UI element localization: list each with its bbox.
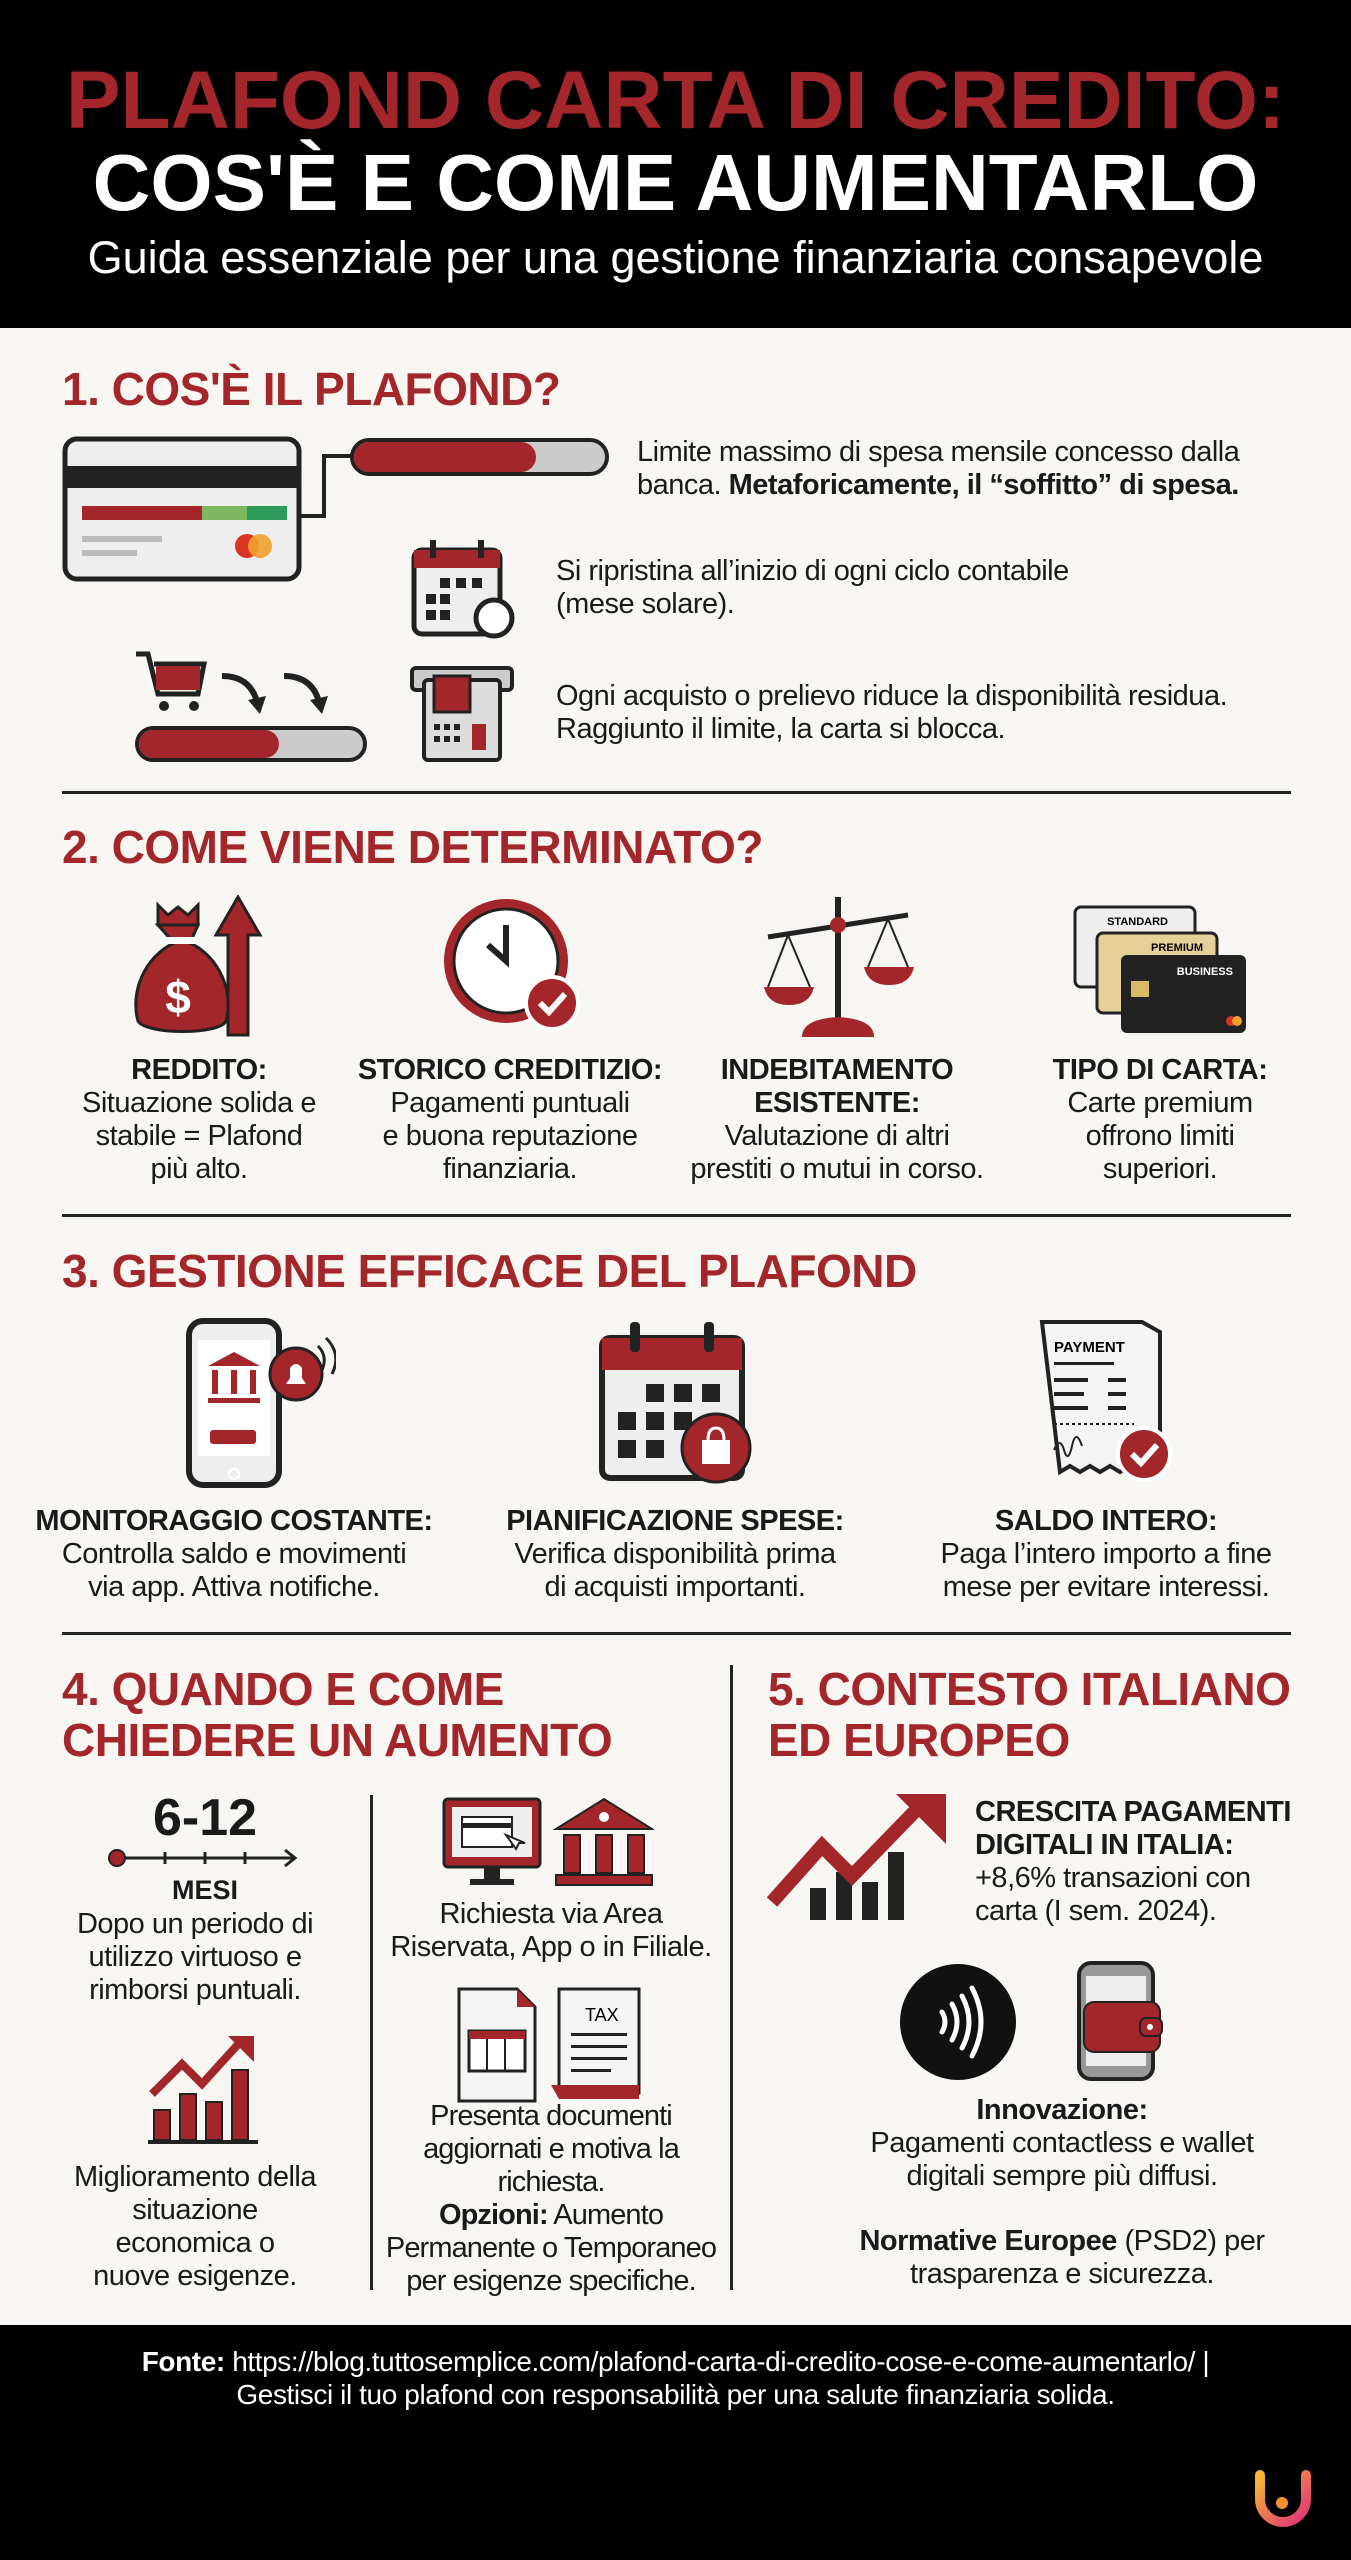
icon: contactless	[900, 1964, 1016, 2080]
text: normative	[859, 2225, 1265, 2290]
label: indebitamento: Valutazione di altri	[725, 1120, 949, 1152]
label: indebitamento: ESISTENTE:	[754, 1087, 920, 1119]
text: innovazione: Innovazione:	[976, 2094, 1148, 2126]
label: monitoraggio: MONITORAGGIO COSTANTE:	[35, 1505, 433, 1537]
timeline 6-12 mesi	[108, 1789, 298, 1905]
icon: clock check	[444, 899, 580, 1031]
header	[0, 0, 1351, 328]
section 2 heading: 2. COME VIENE DETERMINATO?	[62, 821, 763, 873]
label: reddito: stabile = Plafond	[96, 1120, 302, 1152]
section 5 heading: 5. CONTESTO ITALIANO	[768, 1663, 1290, 1715]
text: reset cycle	[556, 555, 1069, 620]
text: crescita: CRESCITA PAGAMENTI	[975, 1796, 1291, 1828]
text: periodo: Dopo un periodo di	[77, 1908, 313, 1940]
text: miglioramento: situazione	[132, 2194, 258, 2226]
label: reddito: più alto.	[150, 1153, 248, 1185]
label: storico: Pagamenti puntuali	[390, 1087, 630, 1119]
text: reset cycle: Si ripristina all’inizio di ogni ciclo contabile	[556, 555, 1069, 587]
text: periodo: rimborsi puntuali.	[89, 1974, 301, 2006]
icon: payment receipt: PAYMENT	[1054, 1339, 1125, 1356]
label: pianificazione	[506, 1505, 844, 1603]
title line 1: PLAFOND CARTA DI CREDITO:	[66, 55, 1285, 146]
icons: documents: TAX	[585, 2005, 619, 2025]
text: crescita: carta (I sem. 2024).	[975, 1895, 1216, 1927]
icon: calendar reset	[412, 540, 514, 638]
label: indebitamento	[690, 1054, 984, 1185]
text: miglioramento: economica o	[116, 2227, 274, 2259]
icon: trend arrow	[766, 1794, 946, 1920]
icon: scale	[764, 897, 914, 1037]
label: tipo carta: offrono limiti	[1086, 1120, 1234, 1152]
icon: cart and decreasing bar	[135, 652, 367, 762]
text: spending reduces: Ogni acquisto o prelievo riduce la disponibilità residua.	[556, 680, 1227, 712]
text: innovazione: Pagamenti contactless e wallet	[870, 2127, 1254, 2159]
icon: ATM	[410, 666, 514, 762]
label: saldo intero: Paga l’intero importo a fine	[940, 1538, 1271, 1570]
label: monitoraggio: Controlla saldo e movimenti	[62, 1538, 406, 1570]
subtitle: Guida essenziale per una gestione finanziaria consapevole	[88, 232, 1263, 283]
footer text: Fonte: https://blog.tuttosemplice.com/plafond-carta-di-credito-cose-e-come-aumentarlo/ |	[142, 2346, 1209, 2377]
label: pianificazione: Verifica disponibilità prima	[514, 1538, 836, 1570]
icon: phone wallet	[1077, 1961, 1163, 2081]
icon: payment receipt	[1040, 1320, 1172, 1482]
label: storico	[358, 1054, 662, 1185]
label: indebitamento: INDEBITAMENTO	[721, 1054, 953, 1086]
text: definition	[637, 436, 1240, 501]
text: miglioramento: Miglioramento della	[74, 2161, 316, 2193]
label: monitoraggio: via app. Attiva notifiche.	[88, 1571, 380, 1603]
title line 2: COS'È E COME AUMENTARLO	[93, 138, 1258, 227]
label: reddito: REDDITO:	[131, 1054, 267, 1086]
label: storico: STORICO CREDITIZIO:	[358, 1054, 662, 1086]
icon: calendar with bag	[599, 1322, 752, 1484]
label: tipo carta: TIPO DI CARTA:	[1053, 1054, 1267, 1086]
timeline 6-12 mesi: MESI	[172, 1875, 238, 1905]
label: tipo carta	[1052, 1054, 1267, 1185]
text: documenti e opzioni: richiesta.	[497, 2166, 605, 2198]
label: indebitamento: prestiti o mutui in corso.	[690, 1153, 984, 1185]
footer text: Gestisci il tuo plafond con responsabilità per una salute finanziaria solida.	[236, 2379, 1115, 2410]
text: spending reduces	[556, 680, 1227, 745]
icon: card tiers	[1074, 906, 1246, 1033]
text: reset cycle: (mese solare).	[556, 588, 734, 620]
icons: documents	[458, 1988, 640, 2102]
label: tipo carta: superiori.	[1103, 1153, 1217, 1185]
text: richiesta	[390, 1898, 712, 1963]
text: normative: Normative Europee (PSD2) per	[859, 2225, 1265, 2257]
label: pianificazione: di acquisti importanti.	[545, 1571, 805, 1603]
label: saldo intero: SALDO INTERO:	[995, 1505, 1217, 1537]
text: richiesta: Riservata, App o in Filiale.	[390, 1931, 712, 1963]
text: periodo	[77, 1908, 313, 2006]
icon: money bag: $	[165, 971, 191, 1023]
icons: monitor and bank	[442, 1798, 654, 1886]
section 5 heading: ED EUROPEO	[768, 1714, 1070, 1766]
text: definition: Limite massimo di spesa mensile concesso dalla	[637, 436, 1239, 468]
label: storico: finanziaria.	[443, 1153, 577, 1185]
text: crescita: +8,6% transazioni con	[975, 1862, 1251, 1894]
text: documenti e opzioni: aggiornati e motiva la	[423, 2133, 679, 2165]
icon: card tiers: BUSINESS	[1177, 966, 1233, 978]
text: periodo: utilizzo virtuoso e	[89, 1941, 301, 1973]
label: reddito	[82, 1054, 316, 1185]
section 4 heading: CHIEDERE UN AUMENTO	[62, 1714, 612, 1766]
text: normative: trasparenza e sicurezza.	[910, 2258, 1214, 2290]
text: spending reduces: Raggiunto il limite, la carta si blocca.	[556, 713, 1005, 745]
text: documenti e opzioni	[386, 2100, 716, 2297]
icon: phone with bank and bell	[186, 1318, 336, 1488]
label: saldo intero	[940, 1505, 1271, 1603]
icon: money bag	[134, 895, 262, 1036]
footer	[0, 2325, 1351, 2560]
section 5 heading	[768, 1663, 1290, 1766]
section 4 heading	[62, 1663, 612, 1766]
text: innovazione: digitali sempre più diffusi.	[906, 2160, 1218, 2192]
text: miglioramento: nuove esigenze.	[93, 2260, 297, 2292]
label: reddito: Situazione solida e	[82, 1087, 316, 1119]
text: definition: banca. Metaforicamente, il “soffitto” di spesa.	[637, 469, 1239, 501]
logo	[1255, 2470, 1311, 2527]
label: monitoraggio	[35, 1505, 433, 1603]
text: crescita: DIGITALI IN ITALIA:	[975, 1829, 1233, 1861]
section 3 heading: 3. GESTIONE EFFICACE DEL PLAFOND	[62, 1245, 917, 1297]
label: storico: e buona reputazione	[383, 1120, 637, 1152]
label: tipo carta: Carte premium	[1067, 1087, 1253, 1119]
text: richiesta: Richiesta via Area	[439, 1898, 663, 1930]
footer text	[142, 2346, 1209, 2410]
text: documenti e opzioni: Presenta documenti	[430, 2100, 672, 2132]
section 1 heading: 1. COS'È IL PLAFOND?	[62, 363, 560, 415]
text: documenti e opzioni: per esigenze specifiche.	[406, 2265, 696, 2297]
label: saldo intero: mese per evitare interessi.	[943, 1571, 1269, 1603]
icon: credit card with bar	[62, 436, 609, 582]
icon: card tiers: PREMIUM	[1151, 942, 1203, 954]
label: pianificazione: PIANIFICAZIONE SPESE:	[506, 1505, 844, 1537]
text: miglioramento	[74, 2161, 316, 2292]
text: crescita	[975, 1796, 1291, 1927]
icon: growth chart	[148, 2036, 258, 2144]
text: documenti e opzioni: Permanente o Temporaneo	[386, 2232, 716, 2264]
timeline 6-12 mesi: 6-12	[153, 1789, 257, 1847]
text: innovazione	[870, 2094, 1254, 2192]
icon: card tiers: STANDARD	[1107, 916, 1168, 928]
section 4 heading: 4. QUANDO E COME	[62, 1663, 504, 1715]
text: documenti e opzioni: Opzioni: Aumento	[439, 2199, 663, 2231]
